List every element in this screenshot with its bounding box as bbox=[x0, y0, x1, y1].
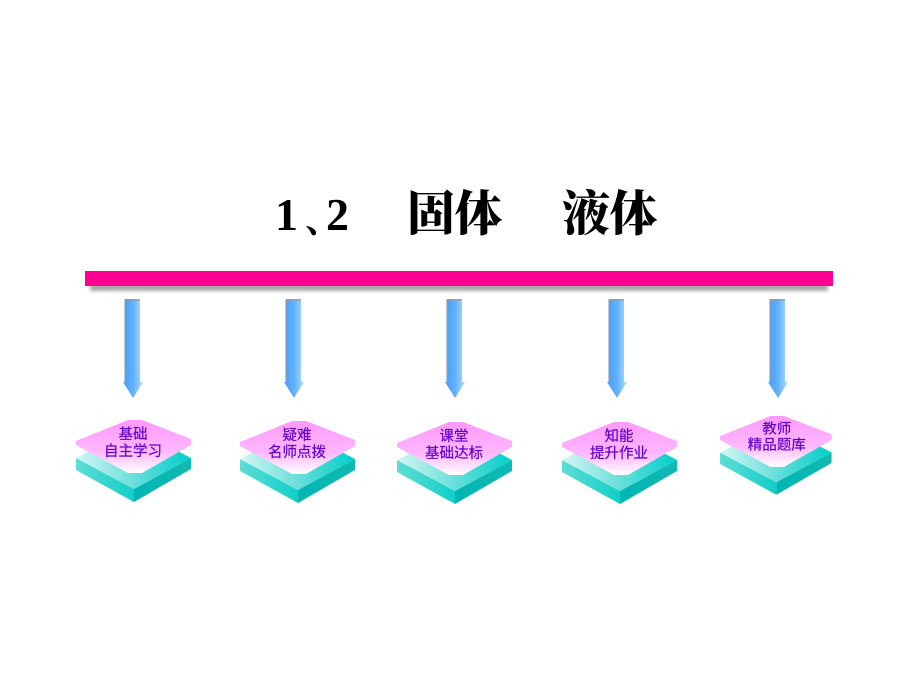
arrow 2 bbox=[284, 299, 304, 398]
block 3: 课堂基础达标: 课堂 bbox=[440, 428, 468, 445]
arrow 5 bbox=[768, 299, 788, 398]
block 5: 教师精品题库: 精品题库 bbox=[748, 437, 806, 454]
pink divider bar bbox=[85, 271, 833, 291]
block 1: 基础自主学习: 基础 bbox=[118, 426, 148, 443]
block 1: 基础自主学习: 自主学习 bbox=[104, 443, 162, 460]
title bbox=[275, 188, 658, 241]
block 1: 基础自主学习 bbox=[76, 420, 191, 502]
block 5: 教师精品题库: 教师 bbox=[762, 420, 791, 437]
title: 液体 bbox=[562, 188, 658, 241]
block 4: 知能提升作业 bbox=[562, 422, 677, 504]
title: 2 bbox=[326, 189, 349, 240]
block 5: 教师精品题库 bbox=[720, 416, 832, 495]
block 3: 课堂基础达标: 基础达标 bbox=[425, 445, 483, 462]
block 2: 疑难名师点拨 bbox=[240, 421, 355, 503]
arrow 3 bbox=[445, 299, 465, 398]
arrow 4 bbox=[607, 299, 627, 398]
block 4: 知能提升作业: 提升作业 bbox=[590, 445, 648, 462]
block 4: 知能提升作业: 知能 bbox=[604, 428, 634, 445]
block 3: 课堂基础达标 bbox=[397, 422, 512, 504]
title: 、 bbox=[305, 200, 341, 240]
arrow 1 bbox=[123, 299, 143, 398]
title: 1 bbox=[275, 189, 298, 240]
block 2: 疑难名师点拨: 疑难 bbox=[282, 427, 312, 444]
title: 固体 bbox=[407, 188, 503, 241]
block 2: 疑难名师点拨: 名师点拨 bbox=[268, 444, 326, 461]
